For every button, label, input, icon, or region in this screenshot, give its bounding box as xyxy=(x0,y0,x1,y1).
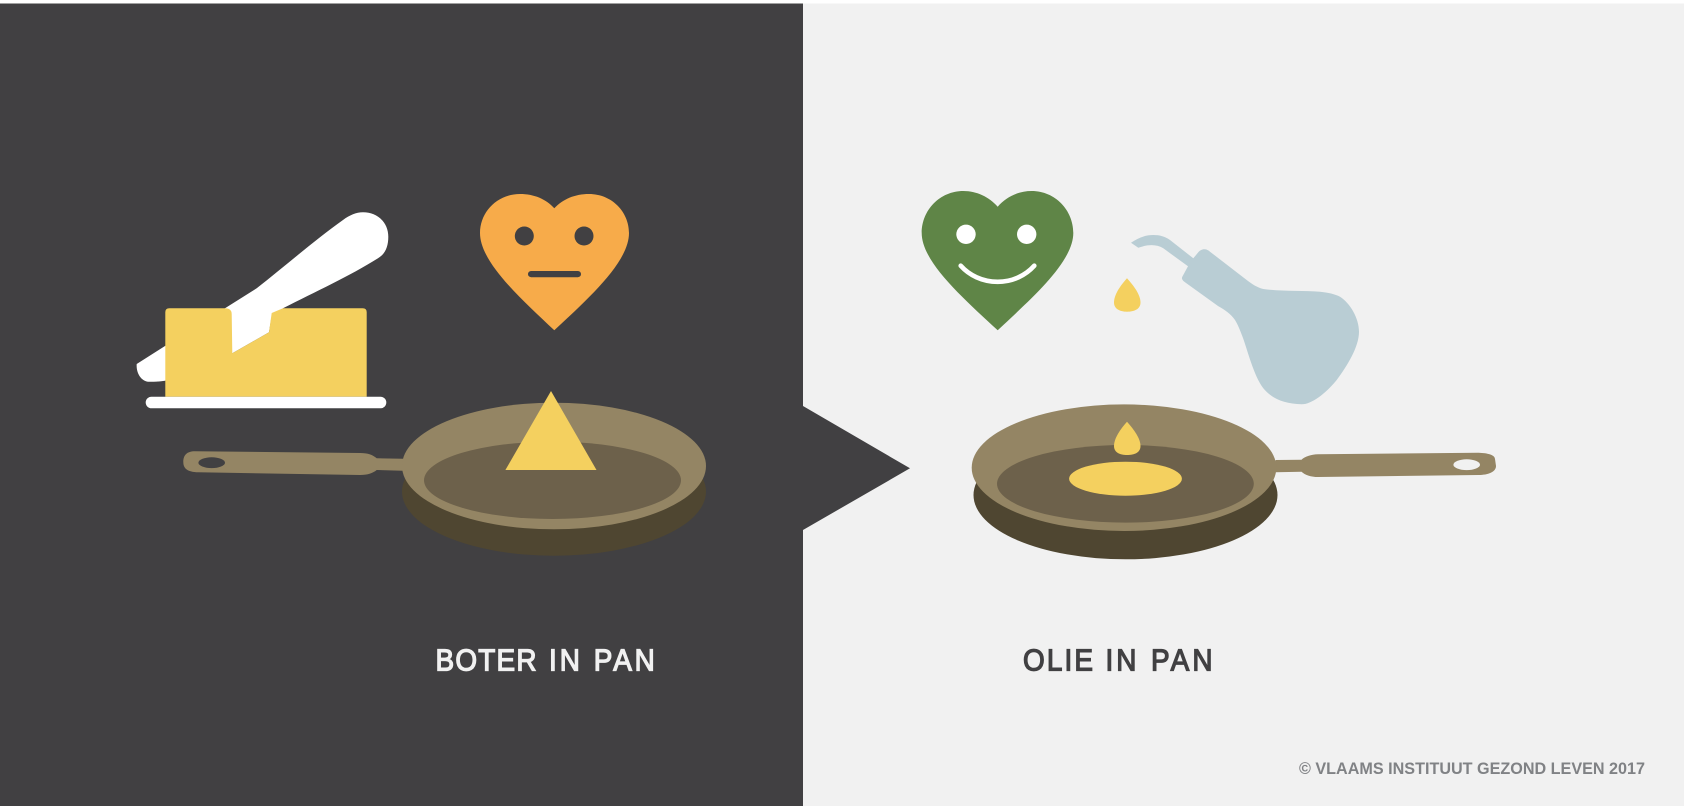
oil drop xyxy=(1114,422,1140,455)
left eye xyxy=(515,226,534,246)
butter triangle xyxy=(505,391,596,470)
heading: olie in pan: IN xyxy=(1106,643,1136,678)
heading: olie in pan: PAN xyxy=(1151,643,1212,678)
heading: boter in pan xyxy=(436,643,655,678)
knife xyxy=(137,212,388,382)
right eye xyxy=(574,226,594,246)
heading: boter in pan: IN xyxy=(549,643,580,678)
icon: frying pan with butter xyxy=(183,391,706,556)
pan rim xyxy=(402,403,706,529)
handle hole xyxy=(198,457,225,468)
pan inner xyxy=(424,442,681,519)
panel: dark background boter with arrow xyxy=(0,4,910,806)
flat mouth xyxy=(528,271,581,277)
right eye xyxy=(1017,225,1036,244)
panel: light background olie xyxy=(803,4,1684,806)
icon: butter dish with knife xyxy=(137,212,388,408)
heading: olie in pan xyxy=(1023,643,1212,678)
heading: boter in pan: PAN xyxy=(594,643,655,678)
pan inner xyxy=(997,445,1254,523)
pan rim xyxy=(972,404,1276,531)
pan handle xyxy=(1276,453,1496,477)
heading: olie in pan: OLIE xyxy=(1023,643,1093,678)
butter block xyxy=(165,308,367,397)
heading: boter in pan: BOTER xyxy=(436,643,536,678)
pan underside xyxy=(402,427,706,556)
butter dish plate xyxy=(146,397,386,408)
icon: happy green heart xyxy=(922,191,1073,330)
smile xyxy=(961,266,1034,282)
icon: frying pan with oil xyxy=(972,404,1496,559)
icon: oil bottle xyxy=(1131,235,1359,404)
oil puddle xyxy=(1069,462,1182,496)
copyright credit: © VLAAMS INSTITUUT GEZOND LEVEN 2017 xyxy=(1299,759,1645,778)
pan underside xyxy=(974,431,1278,559)
icon: neutral orange heart xyxy=(480,194,629,330)
icon: falling oil drop xyxy=(1114,278,1140,312)
left eye xyxy=(956,225,976,244)
handle hole xyxy=(1453,459,1480,470)
pan handle xyxy=(183,451,403,475)
